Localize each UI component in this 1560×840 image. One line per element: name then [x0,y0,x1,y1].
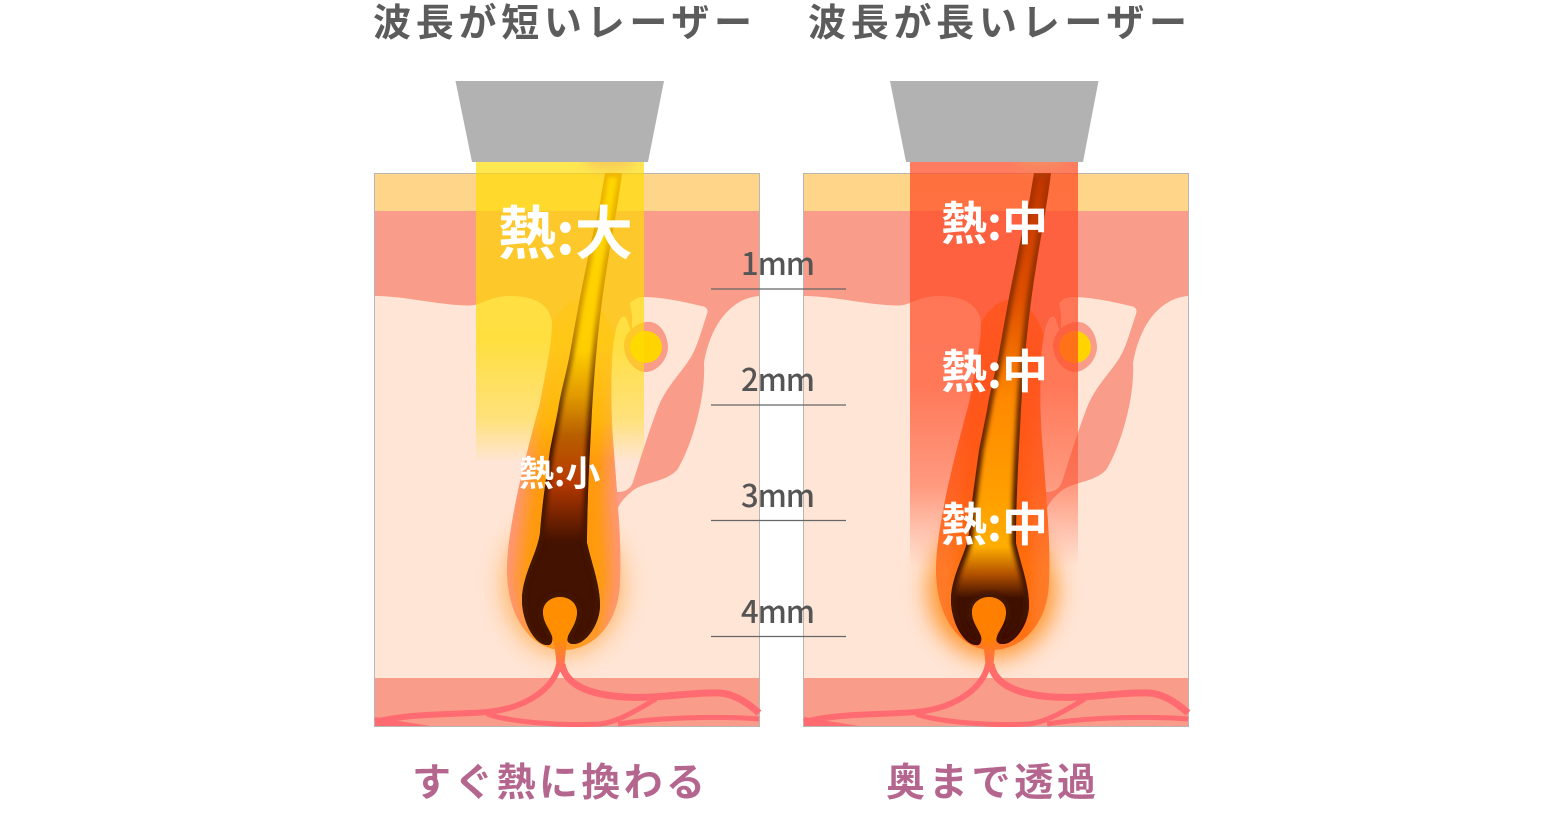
heat label: large: 熱:大 [498,187,633,271]
depth label 4mm: 4mm [741,587,815,632]
probe glow [584,150,636,170]
heat label: medium, upper: 熱:中 [941,188,1048,254]
depth label 2mm: 2mm [741,355,815,400]
depth scale [711,239,846,636]
panel: long wavelength skin diagram [804,81,1188,726]
heat label: medium, middle: 熱:中 [941,336,1048,402]
laser probe [890,81,1098,162]
follicle sheath [936,300,1050,650]
caption: penetrates deep: 奥まで透過 [886,752,1096,808]
skin cross-section [804,174,1188,726]
laser probe [456,81,664,162]
follicle sheath [507,300,620,650]
bulb glow [928,522,1056,658]
laser beam: yellow [476,162,644,462]
depth label 3mm: 3mm [741,471,815,516]
heat label: medium, lower: 熱:中 [941,489,1048,555]
panel: short wavelength skin diagram [374,81,760,726]
probe glow [1014,150,1066,170]
bulb glow [503,515,623,655]
laser beam: red-orange [910,162,1078,568]
hair [951,173,1051,672]
skin cross-section [374,174,760,726]
papilla [972,597,1006,672]
papilla [543,597,577,672]
heat label: small: 熱:小 [519,446,600,497]
depth label 1mm: 1mm [741,239,815,284]
hair [522,173,622,672]
caption: converts to heat immediately: すぐ熱に換わる [412,752,705,808]
